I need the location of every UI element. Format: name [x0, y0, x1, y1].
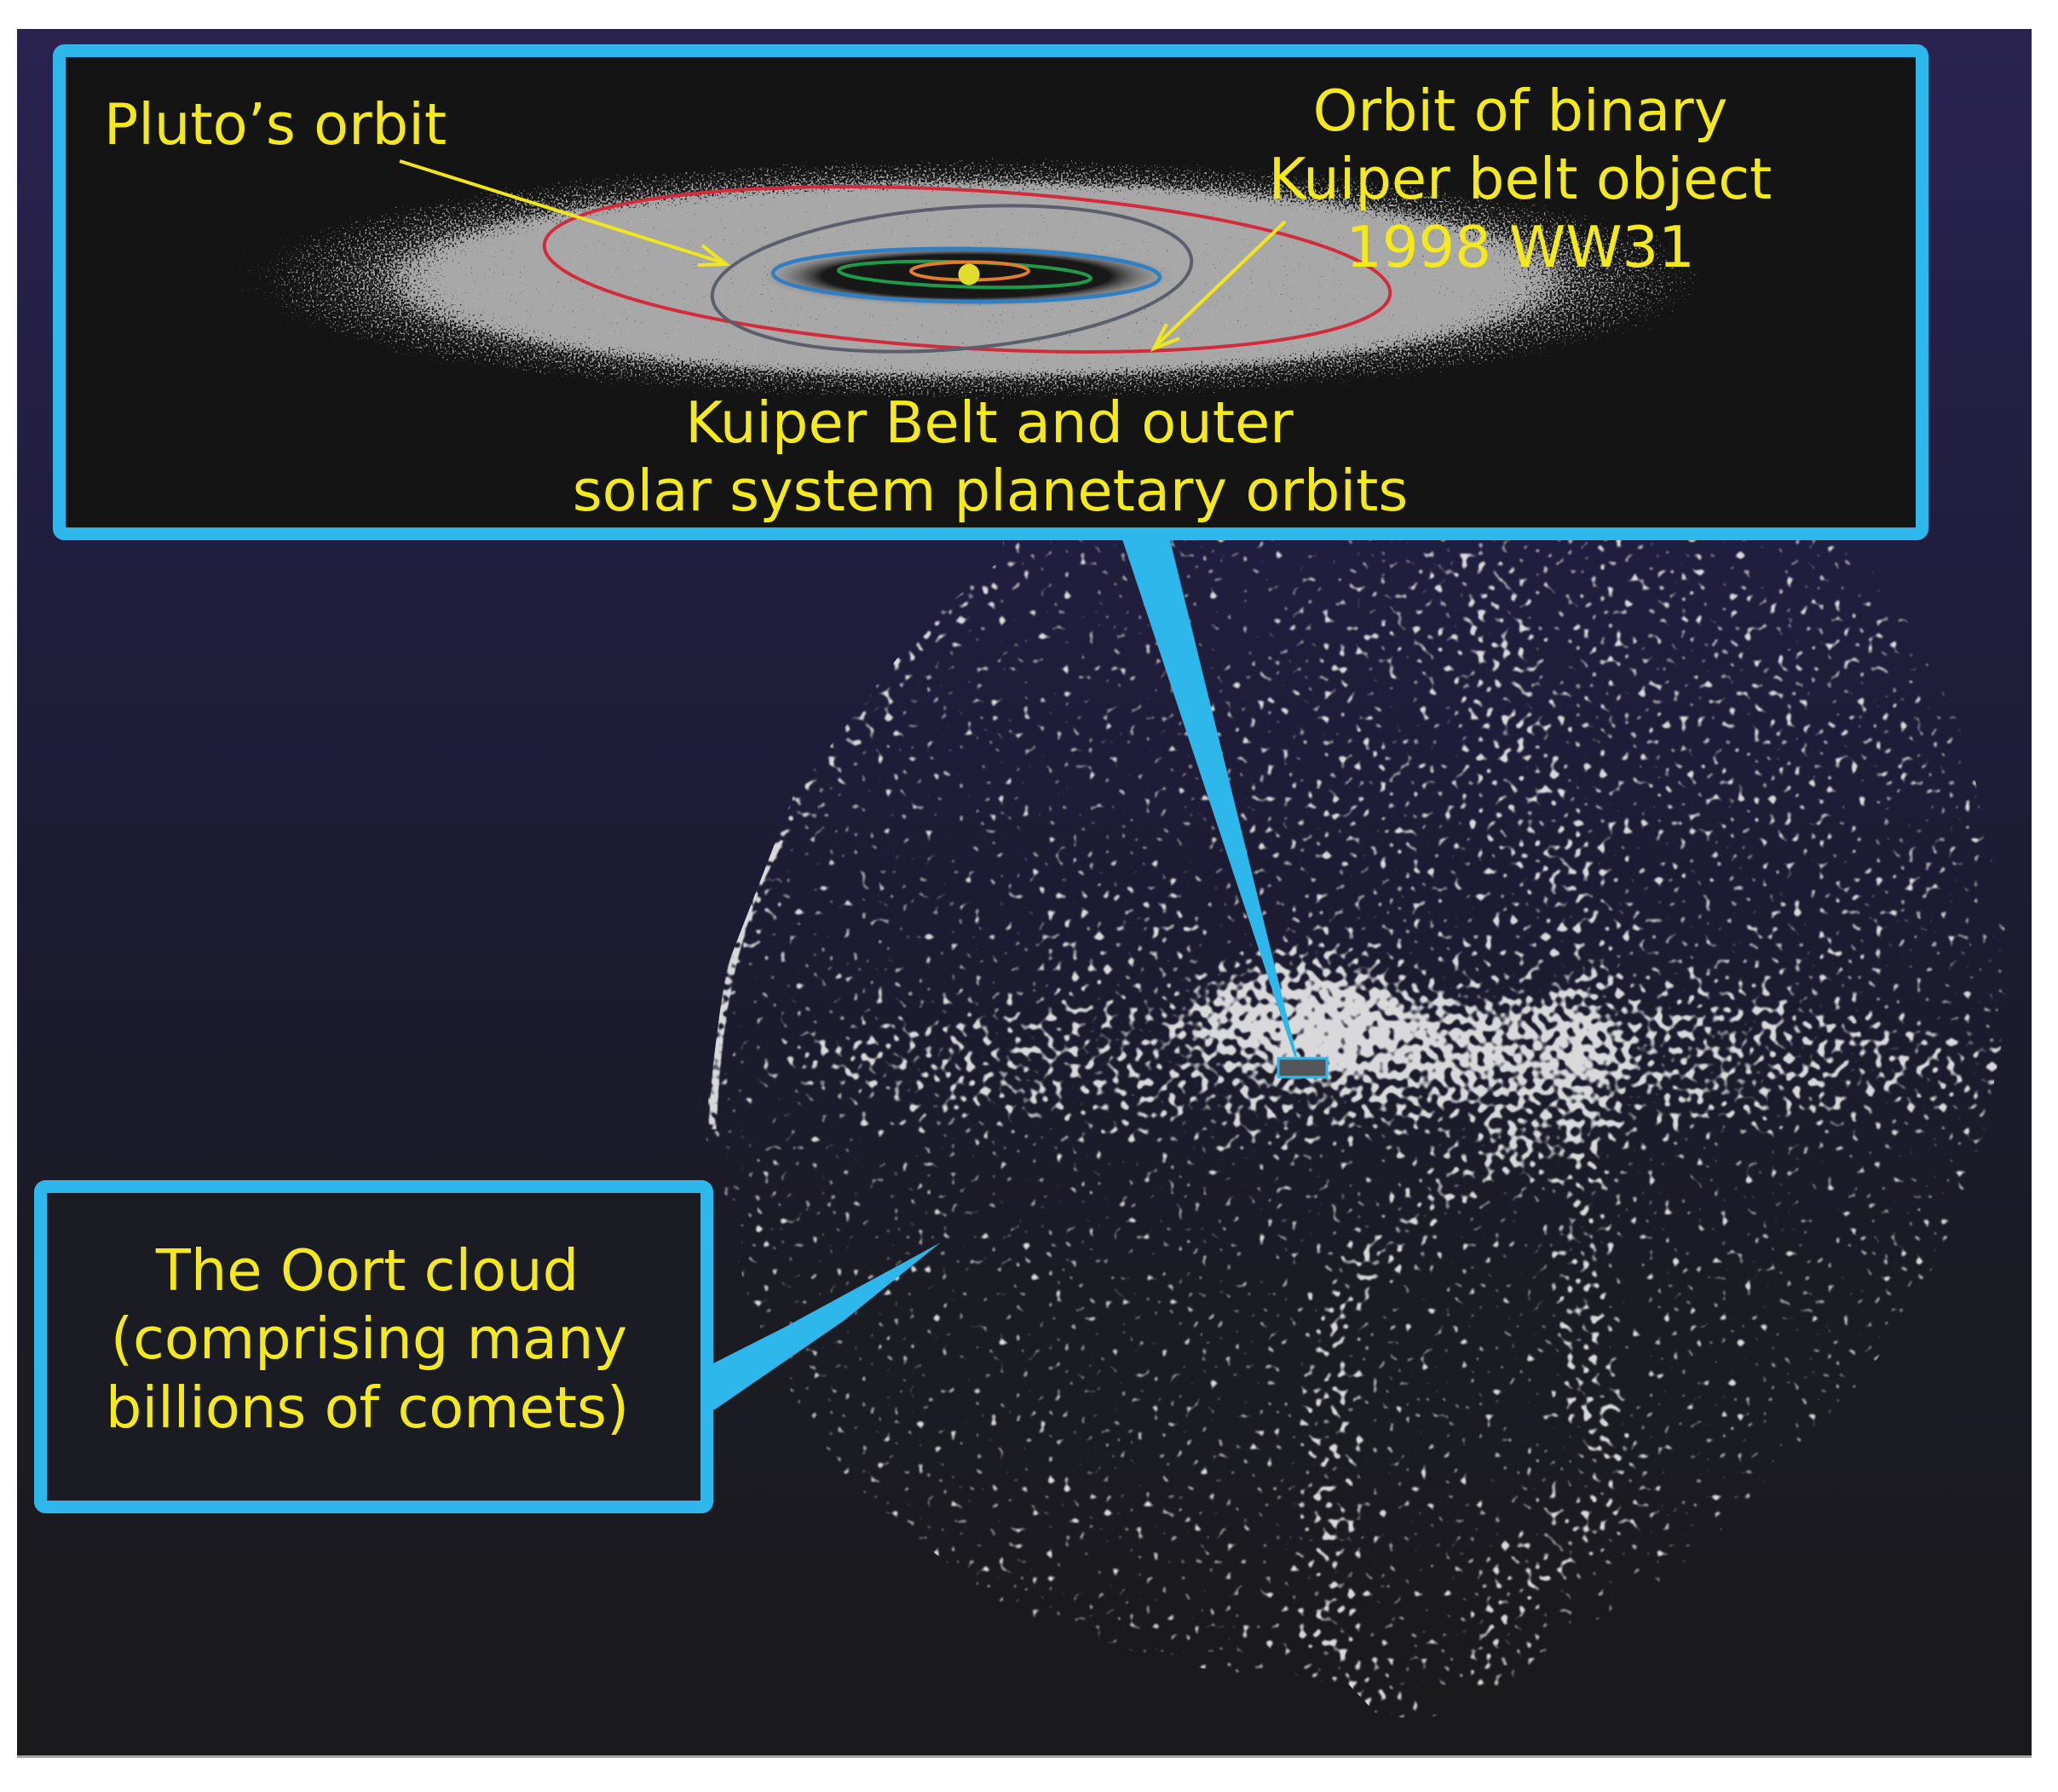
panel: Kuiper Belt and outer solar system [60, 51, 1923, 533]
chart: Pluto's orbit [706, 189, 1197, 368]
chart: Saturn orbit [911, 262, 1029, 279]
heading: Kuiper Belt caption: Kuiper Belt and outer [685, 389, 1294, 456]
chart: dark cleared inner solar system [755, 245, 1178, 308]
heading: Kuiper Belt caption [573, 389, 1408, 524]
icon: small locator rectangle for the solar system region [1278, 1058, 1327, 1077]
text: The Oort cloud caption: The Oort cloud [155, 1237, 579, 1304]
panel: Oort cloud label [41, 1186, 707, 1507]
chart: Kuiper belt particle disc [209, 152, 1743, 407]
chart: Uranus orbit [839, 258, 1091, 291]
arrow: to Pluto's orbit [400, 161, 726, 265]
icon: Sun [958, 264, 980, 285]
arrow: pointer from Oort cloud label into the cloud [712, 1242, 941, 1409]
label: Orbit of binary Kuiper belt object: Orbit of binary [1313, 78, 1727, 144]
heading: Kuiper Belt caption: solar system planetary orbits [573, 458, 1408, 524]
label: Orbit of binary Kuiper belt object: 1998 WW31 [1346, 214, 1695, 280]
text: The Oort cloud caption: (comprising many [111, 1305, 627, 1372]
label: Orbit of binary Kuiper belt object [1269, 78, 1772, 280]
chart: Oort cloud comet scatter [682, 511, 2045, 1755]
label: Pluto's orbit: Pluto’s orbit [104, 91, 447, 158]
arrow: to binary object orbit [1154, 222, 1285, 349]
text: The Oort cloud caption: billions of comets) [106, 1374, 629, 1441]
chart: Neptune orbit [773, 247, 1160, 303]
text: The Oort cloud caption [106, 1237, 629, 1441]
chart: orbit of binary Kuiper belt object [539, 166, 1395, 372]
label: Orbit of binary Kuiper belt object: Kuiper belt object [1269, 146, 1772, 212]
arrow: zoom pointer from Kuiper Belt panel to the central region [1121, 537, 1297, 1057]
